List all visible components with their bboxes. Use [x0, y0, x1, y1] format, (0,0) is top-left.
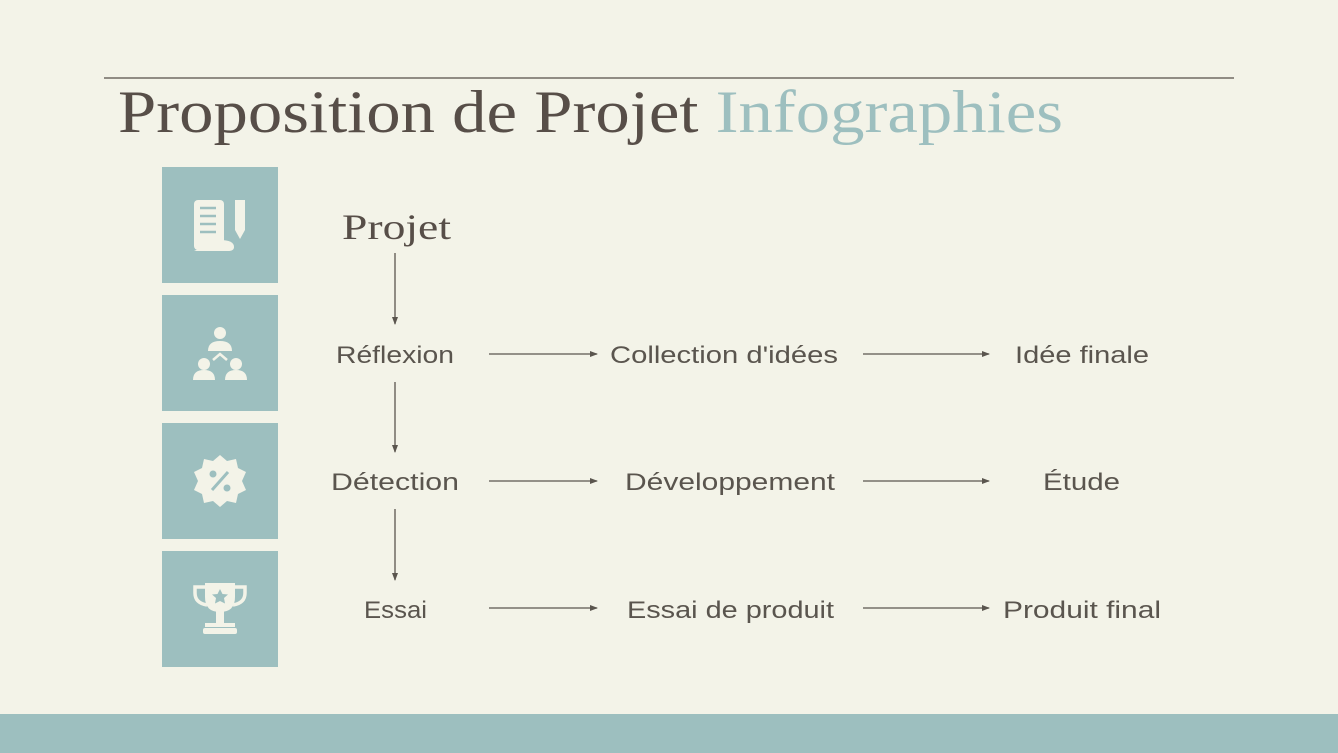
row 3: Essai [364, 597, 427, 624]
row 1 [336, 342, 1149, 369]
flow diagram [331, 253, 1161, 624]
row 3: Essai de produit [627, 597, 834, 624]
heading: Projet: Projet [342, 207, 451, 247]
row 2: Étude [1043, 469, 1120, 496]
panel: icon column [162, 167, 278, 667]
icon: discount badge [162, 423, 278, 539]
row 2: Développement [625, 469, 835, 496]
row 2 [331, 469, 1120, 496]
title: Proposition de Projet Infographies [118, 79, 1063, 145]
icon: trophy [162, 551, 278, 667]
icon: team [162, 295, 278, 411]
row 1: Collection d'idées [610, 342, 838, 369]
row 3 [364, 597, 1161, 624]
row 3: Produit final [1003, 597, 1161, 624]
icon: document with pencil [162, 167, 278, 283]
row 1: Idée finale [1015, 342, 1149, 369]
arrows: vertical [394, 253, 396, 580]
row 1: Réflexion [336, 342, 454, 369]
row 2: Détection [331, 469, 459, 496]
footer band [0, 714, 1338, 753]
